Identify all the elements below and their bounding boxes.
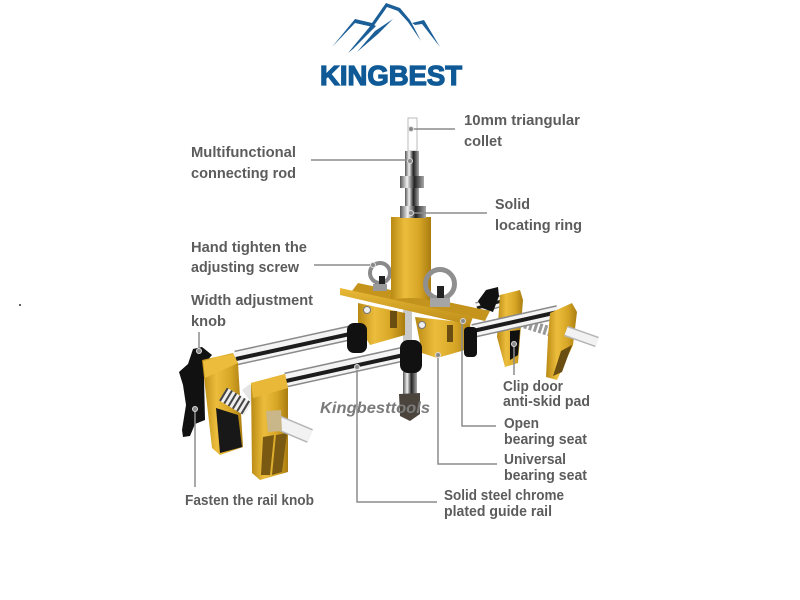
callout: fasten the rail knob [185,406,314,509]
callout: open bearing seat [460,318,587,448]
rear eye bolt [370,263,390,291]
callout: solid locating ring [408,197,582,234]
callout: multifunctional connecting rod: connecting rod [191,166,296,182]
callout: clip door anti-skid pad: Clip door [503,379,563,395]
callout: 10mm triangular collet: 10mm triangular [464,113,580,129]
callout: clip door anti-skid pad: anti-skid pad [503,394,590,410]
callout: open bearing seat: bearing seat [504,432,587,448]
front guide rail [286,312,558,381]
left rear clamp [202,353,243,455]
left front clamp [251,374,310,480]
callout: hand tighten the adjusting screw [191,240,376,276]
watermark: Kingbesttools [320,400,430,417]
callout: universal bearing seat [436,352,587,484]
callout: clip door anti-skid pad [503,342,590,410]
left knob [179,347,212,437]
icon: mountains [332,3,440,53]
callout: multifunctional connecting rod [191,145,412,182]
central cylinder and collet [391,118,431,306]
callout: solid steel chrome plated guide rail [354,364,564,520]
back plate [352,283,490,321]
spring [223,387,257,409]
callout: solid locating ring: Solid [495,197,530,213]
callout: open bearing seat: Open [504,416,539,432]
right front clamp [546,303,597,380]
callout: width adjustment knob: knob [191,314,226,330]
callout: width adjustment knob: Width adjustment [191,293,313,309]
callout: universal bearing seat: bearing seat [504,468,587,484]
callout: universal bearing seat: Universal [504,452,566,468]
callout: 10mm triangular collet [408,113,580,150]
callout: solid steel chrome plated guide rail: Solid steel chrome [444,488,564,504]
callout: solid locating ring: locating ring [495,218,582,234]
product illustration: hinge jig [179,118,597,480]
callout: hand tighten the adjusting screw: Hand tighten the [191,240,307,256]
black rail collars [347,323,477,373]
back guide rail [236,300,505,359]
front eye bolt [426,270,454,307]
callout: solid steel chrome plated guide rail: plated guide rail [444,504,552,520]
wordmark: KINGBEST [320,60,462,91]
callout: fasten the rail knob: Fasten the rail knob [185,493,314,509]
callout: multifunctional connecting rod: Multifunctional [191,145,296,161]
stray dot [19,304,21,306]
callout: width adjustment knob [191,293,313,354]
bearing seats [358,303,472,358]
logo: KINGBEST [320,3,462,91]
callout: hand tighten the adjusting screw: adjusting screw [191,260,300,276]
right rear clamp [478,287,552,367]
callout: 10mm triangular collet: collet [464,134,502,150]
front mounting plate [340,288,473,325]
lower post and cutter [399,310,420,421]
